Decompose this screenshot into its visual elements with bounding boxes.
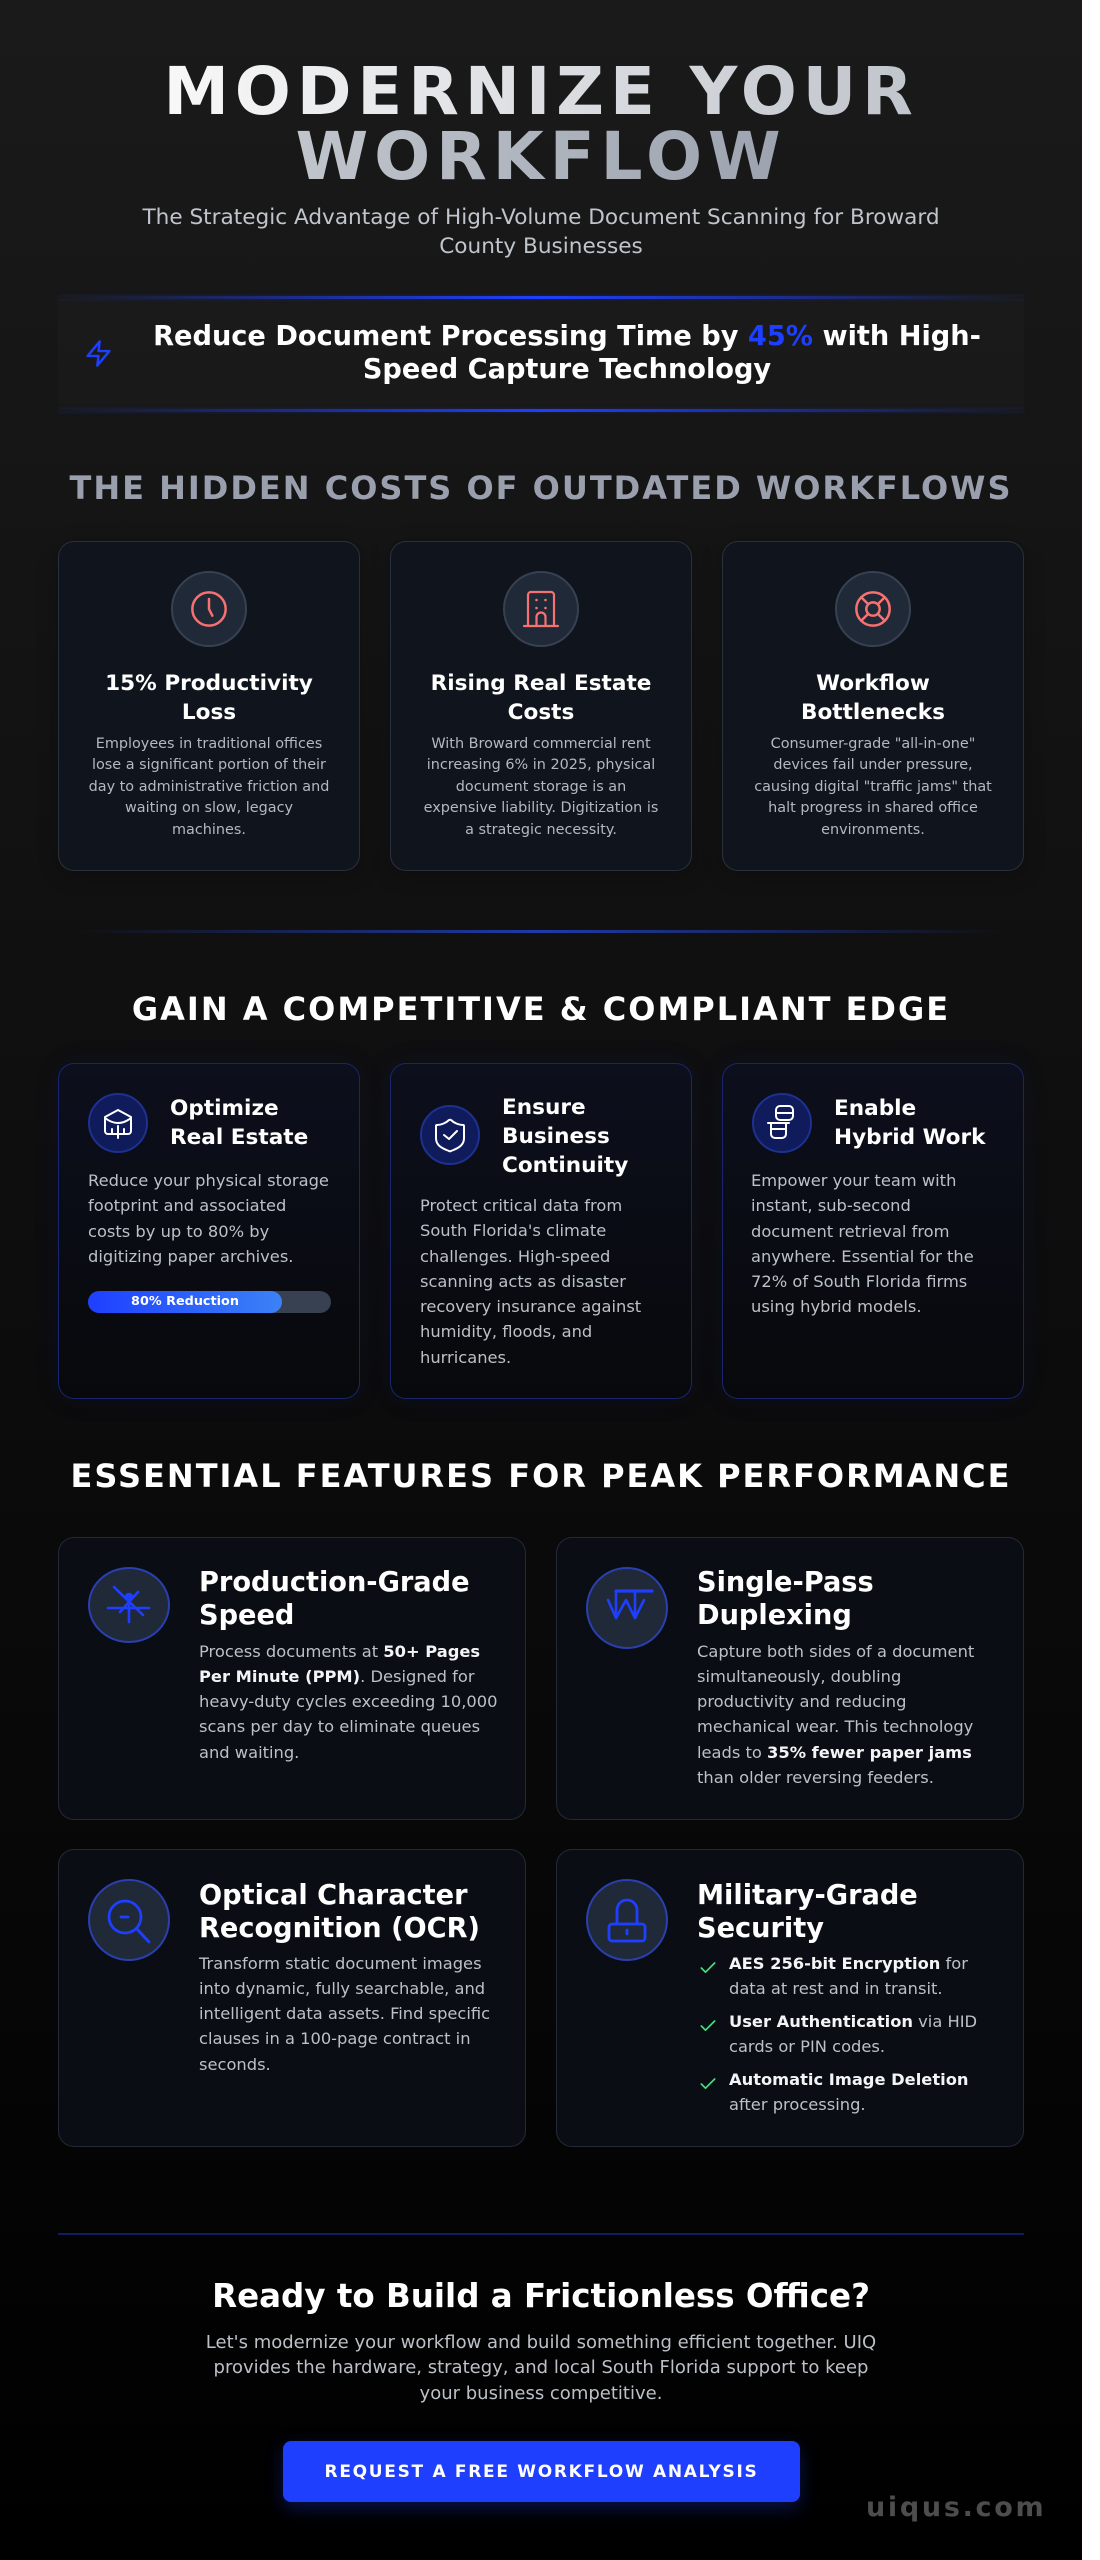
card text: anywhere. Essential for the xyxy=(751,1247,974,1266)
card text: day to administrative friction and xyxy=(89,779,329,795)
feature text: intelligent data assets. Find specific xyxy=(199,2004,490,2023)
card text: document retrieval from xyxy=(751,1222,950,1240)
card text: South Florida's climate xyxy=(420,1221,606,1240)
card text: lose a significant portion of their xyxy=(92,757,326,773)
list item: image deletion: after processing. xyxy=(729,2095,866,2114)
panel: hybrid work xyxy=(722,1063,1024,1399)
feature text: clauses in a 100-page contract in xyxy=(199,2029,471,2048)
list item: image deletion: Automatic Image Deletion xyxy=(729,2070,968,2088)
list item: encryption: data at rest and in transit. xyxy=(729,1979,943,1998)
card text: waiting on slow, legacy xyxy=(125,800,293,816)
feature title xyxy=(199,1567,470,1631)
feature text xyxy=(697,1642,974,1787)
CTA text: your business competitive. xyxy=(420,2382,662,2404)
card text: footprint and associated xyxy=(88,1196,286,1215)
card text xyxy=(751,1171,974,1316)
card text: humidity, floods, and xyxy=(420,1322,592,1341)
card text: instant, sub-second xyxy=(751,1196,911,1215)
feature text: mechanical wear. This technology xyxy=(697,1717,973,1736)
bar fill xyxy=(88,1291,282,1313)
CTA button: REQUEST A FREE WORKFLOW ANALYSIS xyxy=(325,2462,758,2482)
list item: authentication xyxy=(700,2012,977,2056)
banner xyxy=(58,296,1024,412)
bar fill: 80% Reduction xyxy=(131,1294,239,1309)
icon: archive box xyxy=(88,1093,148,1153)
icon: hybrid work xyxy=(752,1093,812,1153)
banner text: Speed Capture Technology xyxy=(363,354,771,385)
feature title: Single-Pass xyxy=(697,1567,874,1598)
card text xyxy=(754,736,992,838)
feature title: Security xyxy=(697,1913,824,1944)
list item: encryption: AES 256-bit Encryption for xyxy=(729,1954,968,1972)
card text: increasing 6% in 2025, physical xyxy=(427,757,655,773)
feature title: Military-Grade xyxy=(697,1880,918,1911)
feature title: Production-Grade xyxy=(199,1567,470,1598)
feature text: Transform static document images xyxy=(199,1954,482,1972)
CTA button xyxy=(283,2441,800,2502)
feature text: productivity and reducing xyxy=(697,1692,906,1711)
icon: duplex xyxy=(586,1567,668,1649)
panel: optimize real estate xyxy=(58,1063,360,1399)
icon: clock xyxy=(171,571,247,647)
card text: a strategic necessity. xyxy=(465,822,617,838)
list item: image deletion xyxy=(700,2070,968,2114)
card title: 15% Productivity xyxy=(105,670,313,696)
card text: devices fail under pressure, xyxy=(773,757,973,773)
card text: 72% of South Florida firms xyxy=(751,1272,967,1291)
banner bottom line xyxy=(58,409,1024,412)
heading: competitive edge: GAIN A COMPETITIVE & COMPLIANT EDGE xyxy=(132,990,950,1028)
card text: environments. xyxy=(821,822,925,838)
panel: production-grade speed xyxy=(58,1537,526,1820)
card text xyxy=(424,736,658,838)
feature text xyxy=(198,1954,490,2074)
card text xyxy=(89,736,329,838)
icon: speed xyxy=(88,1567,170,1643)
card title: Rising Real Estate xyxy=(431,670,651,696)
feature title xyxy=(697,1567,874,1631)
card text: halt progress in shared office xyxy=(768,800,978,816)
banner text xyxy=(153,321,981,385)
list item: encryption xyxy=(700,1954,968,1998)
card title: Bottlenecks xyxy=(801,700,945,724)
panel: productivity loss xyxy=(58,541,360,871)
card title xyxy=(431,670,651,724)
feature text: simultaneously, doubling xyxy=(697,1667,901,1686)
CTA heading: Ready to Build a Frictionless Office? xyxy=(212,2277,870,2315)
security list xyxy=(700,1954,977,2114)
feature title xyxy=(199,1880,480,1944)
panel: OCR xyxy=(58,1849,526,2147)
icon: shield check xyxy=(420,1105,480,1165)
card title xyxy=(170,1096,308,1150)
title: MODERNIZE YOUR xyxy=(163,53,919,130)
card text xyxy=(88,1171,329,1266)
card title xyxy=(801,670,945,724)
feature text: leads to 35% fewer paper jams xyxy=(697,1742,972,1762)
card text: using hybrid models. xyxy=(751,1297,922,1316)
card title xyxy=(502,1095,628,1178)
panel: single-pass duplexing xyxy=(556,1537,1024,1820)
feature text: than older reversing feeders. xyxy=(697,1768,934,1787)
card title: Real Estate xyxy=(170,1125,308,1150)
feature text: Process documents at 50+ Pages xyxy=(199,1642,480,1660)
title xyxy=(163,53,919,195)
panel: real estate costs xyxy=(390,541,692,871)
feature text: seconds. xyxy=(199,2054,271,2074)
subtitle xyxy=(142,205,940,259)
progress bar: 80% reduction xyxy=(88,1291,331,1313)
panel: business continuity xyxy=(390,1063,692,1399)
icon: search xyxy=(88,1879,170,1961)
CTA text: provides the hardware, strategy, and local South Florida support to keep xyxy=(214,2357,868,2378)
card text: Reduce your physical storage xyxy=(88,1171,329,1190)
banner text: Reduce Document Processing Time by 45% with High- xyxy=(153,321,981,352)
card text: hurricanes. xyxy=(420,1348,511,1366)
card title: Optimize xyxy=(170,1096,279,1121)
card text: expensive liability. Digitization is xyxy=(424,800,658,816)
card text: Protect critical data from xyxy=(420,1196,622,1215)
feature title: Recognition (OCR) xyxy=(199,1913,480,1944)
card title: Continuity xyxy=(502,1153,628,1178)
feature text: and waiting. xyxy=(199,1742,299,1762)
card text: costs by up to 80% by xyxy=(88,1222,269,1240)
CTA text xyxy=(206,2332,876,2404)
feature title: Speed xyxy=(199,1600,294,1631)
card text: scanning acts as disaster xyxy=(420,1272,626,1291)
panel: military-grade security xyxy=(556,1849,1024,2147)
subtitle: County Businesses xyxy=(439,234,643,259)
icon: building xyxy=(503,571,579,647)
card title xyxy=(834,1096,986,1150)
card title: Ensure xyxy=(502,1095,586,1120)
feature text: Per Minute (PPM). Designed for xyxy=(199,1667,475,1686)
heading: essential features: ESSENTIAL FEATURES FOR PEAK PERFORMANCE xyxy=(71,1457,1011,1495)
icon: lightning bolt xyxy=(86,340,111,367)
card text: machines. xyxy=(172,822,246,838)
card title: Enable xyxy=(834,1096,916,1121)
card title: Costs xyxy=(508,700,574,724)
card text: digitizing paper archives. xyxy=(88,1247,293,1266)
card text: document storage is an xyxy=(456,779,626,795)
feature text xyxy=(199,1642,497,1762)
CTA text: Let's modernize your workflow and build something efficient together. UIQ xyxy=(206,2332,876,2353)
watermark: uiqus.com xyxy=(866,2492,1046,2523)
banner top line xyxy=(58,296,1024,299)
card text xyxy=(420,1196,641,1366)
card text: challenges. High-speed xyxy=(420,1246,610,1266)
subtitle: The Strategic Advantage of High-Volume Document Scanning for Broward xyxy=(142,205,940,230)
card title: Hybrid Work xyxy=(834,1125,986,1150)
icon: life buoy xyxy=(835,571,911,647)
card text: With Broward commercial rent xyxy=(431,736,651,752)
card title: Business xyxy=(502,1124,610,1149)
feature title: Duplexing xyxy=(697,1600,852,1631)
feature text: Capture both sides of a document xyxy=(697,1642,974,1660)
list item: authentication: cards or PIN codes. xyxy=(729,2037,885,2056)
card title: Loss xyxy=(182,700,236,724)
card title xyxy=(105,670,313,724)
card title: Workflow xyxy=(816,670,930,696)
card text: Employees in traditional offices xyxy=(96,736,322,752)
card text: Empower your team with xyxy=(751,1171,956,1190)
panel: workflow bottlenecks xyxy=(722,541,1024,871)
feature title xyxy=(697,1880,918,1944)
feature text: into dynamic, fully searchable, and xyxy=(199,1979,485,1998)
list item: authentication: User Authentication via HID xyxy=(729,2012,977,2030)
card text: Consumer-grade "all-in-one" xyxy=(771,736,975,752)
feature title: Optical Character xyxy=(199,1880,468,1911)
feature text: scans per day to eliminate queues xyxy=(199,1717,480,1736)
heading: hidden costs: THE HIDDEN COSTS OF OUTDATED WORKFLOWS xyxy=(70,468,1012,506)
card text: causing digital "traffic jams" that xyxy=(754,779,992,795)
title: WORKFLOW xyxy=(296,118,786,195)
icon: lock xyxy=(586,1879,668,1961)
feature text: heavy-duty cycles exceeding 10,000 xyxy=(199,1692,497,1711)
card text: recovery insurance against xyxy=(420,1297,641,1316)
